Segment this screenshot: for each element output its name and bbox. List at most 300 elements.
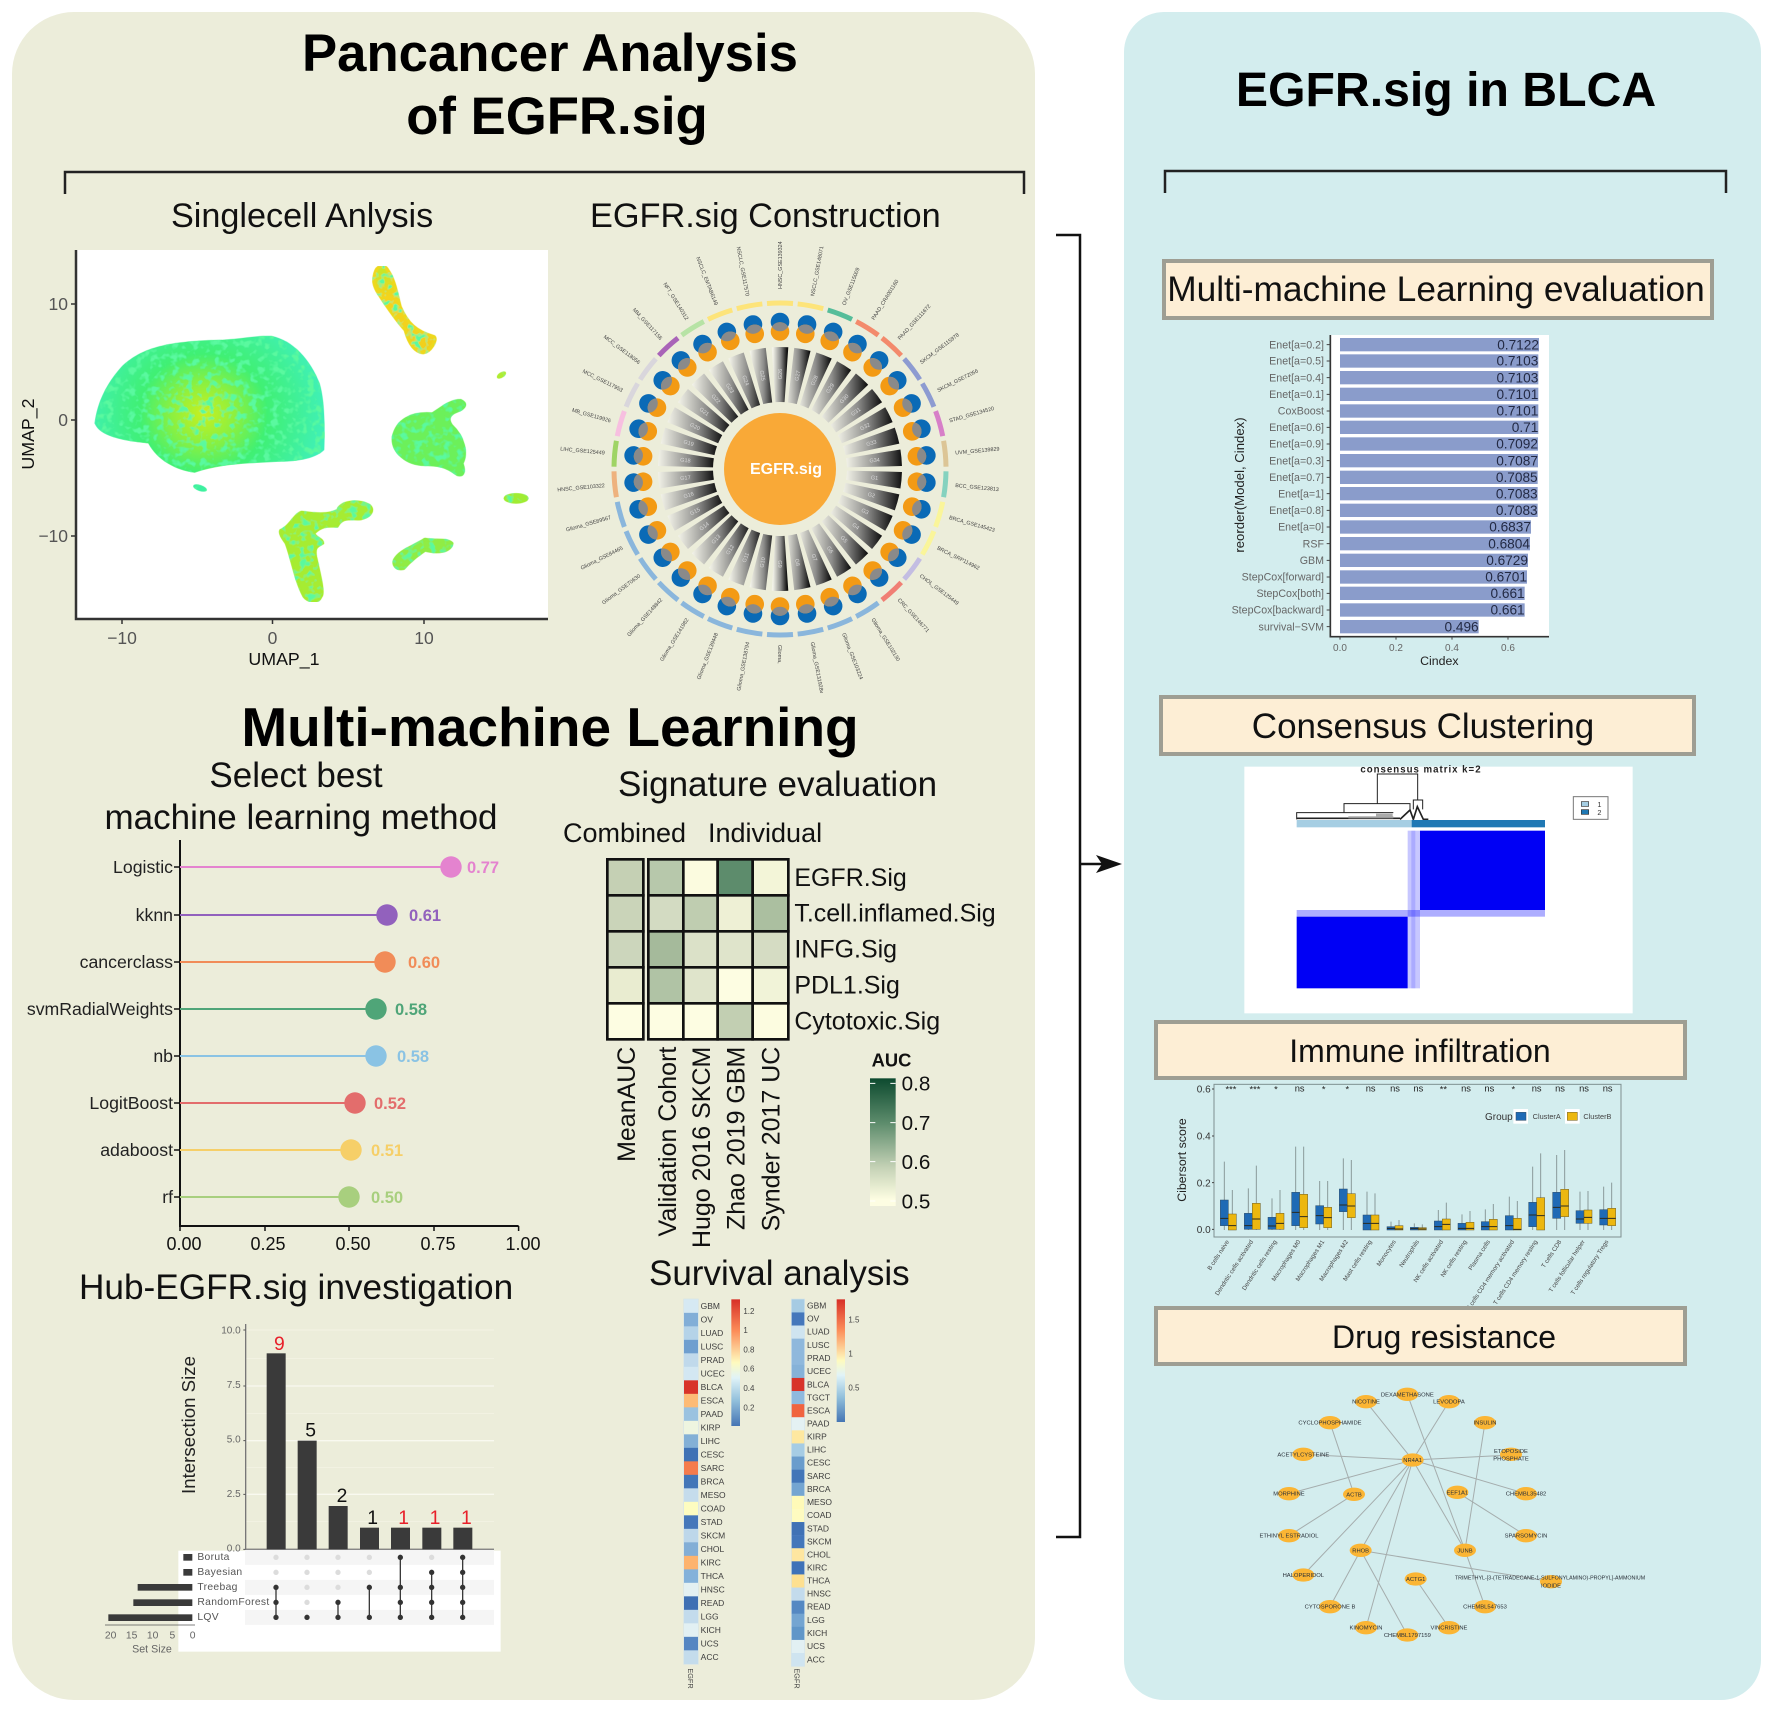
AUC colour legend: AUC: [872, 1050, 911, 1071]
y axis labels: 0.0: [1197, 1225, 1211, 1236]
cell type labels: T cells follicular helper: [1548, 1239, 1587, 1294]
heatmap: cancer types left: [683, 1299, 726, 1689]
centre: EGFR.sig circle: [724, 413, 836, 525]
ring: dataset labels: MCC_GSE118056: [602, 334, 641, 366]
upset y axis labels: 5.0: [227, 1435, 241, 1446]
ring: dataset labels: NSCLC_GSE117570: [735, 246, 750, 297]
model names: StepCox[forward]: [1242, 572, 1324, 584]
heading: Select best machine learning method: Select best: [209, 756, 383, 795]
heatmap row labels: T.cell.inflamed.Sig: [794, 899, 996, 927]
heatmap: cancer types right: KIRC: [807, 1563, 827, 1573]
chart: survival heatmaps: [683, 1299, 860, 1689]
network node labels: KINOMYCIN: [1349, 1626, 1383, 1632]
network nodes: [1278, 1388, 1562, 1642]
network node labels: VINCRISTINE: [1431, 1626, 1468, 1632]
heatmap: cancer types left: UCEC: [701, 1369, 725, 1379]
header box: Immune infiltration: [1156, 1022, 1685, 1078]
lollipop: Logistic: Logistic: [113, 857, 173, 877]
heatmap: cancer types left: SARC: [701, 1463, 724, 1473]
significance markers: ns: [1366, 1084, 1376, 1094]
box plot legend: ClusterA: [1533, 1112, 1561, 1121]
heatmap: cancer types right: SARC: [807, 1471, 831, 1481]
upset set names: [197, 1552, 270, 1623]
heatmap: cancer types right: LGG: [807, 1615, 825, 1625]
heatmap: cancer types right: HNSC: [807, 1589, 831, 1599]
cluster legend: 2: [1597, 808, 1601, 817]
ring: dataset labels: Glioma_GSE103224: [840, 632, 864, 681]
model names: RSF: [1303, 538, 1324, 550]
network node labels: SPARSOMYCIN: [1505, 1534, 1547, 1540]
upset y axis labels: 10.0: [221, 1326, 241, 1337]
ring: bar labels: G26: [778, 369, 784, 379]
Cindex values: 0.496: [1444, 619, 1479, 634]
ring: bar labels: G13: [711, 534, 722, 546]
upset set size axis: Set Size: [132, 1643, 172, 1655]
heatmap row labels: INFG.Sig: [794, 935, 897, 963]
upset bar values: 5: [305, 1421, 316, 1442]
chart: Cindex bar chart: 0.6: [1501, 643, 1515, 654]
upset intersection bars: [267, 1353, 472, 1549]
heading: Multi-machine Learning: Multi-machine Learning: [241, 696, 859, 758]
heatmap: cancer types left: ESCA: [701, 1396, 724, 1406]
Cindex values: 0.7101: [1497, 404, 1538, 419]
heatmap: cancer types right: OV: [807, 1314, 820, 1324]
AUC colour legend: 0.7: [902, 1112, 930, 1135]
heatmap: cancer types right: ACC: [807, 1654, 825, 1664]
lollipop: adaboost: [100, 1139, 403, 1161]
heatmap: cancer types right: READ: [807, 1602, 831, 1612]
chart: Cindex bar chart: [1232, 335, 1549, 668]
cell type labels: NK cells activated: [1412, 1238, 1445, 1284]
lollipop: Logistic: [113, 856, 499, 878]
upset set size axis: 15: [126, 1630, 138, 1641]
heading: Signature evaluation: Signature evaluation: [618, 765, 937, 804]
chart: UMAP scatter plot: 0: [58, 410, 68, 430]
significance markers: ns: [1579, 1084, 1589, 1094]
Cindex values: 0.6701: [1485, 570, 1527, 585]
heatmap: cancer types left: HNSC: [701, 1585, 725, 1595]
heatmap: cancer types right: THCA: [807, 1576, 830, 1586]
Cindex values: [1444, 337, 1539, 634]
heatmap: cancer types right: STAD: [807, 1523, 829, 1533]
heatmap: cancer types left: GBM: [701, 1301, 720, 1311]
cluster B boxes: [1228, 1189, 1616, 1230]
network node labels: [1259, 1392, 1645, 1639]
significance markers: ns: [1461, 1084, 1471, 1094]
ring: bar labels: G10: [759, 557, 767, 568]
ring: bar labels: G6: [825, 545, 834, 555]
legend: right survival colour scale: [837, 1299, 860, 1422]
cell type labels: T cells CD4 memory activated: [1465, 1238, 1516, 1312]
ring: dataset labels: Glioma_GSE102130: [870, 617, 901, 663]
labels: Combined and Individual: [563, 818, 822, 848]
lollipop: adaboost: adaboost: [100, 1140, 173, 1160]
model names: StepCox[both]: [1256, 588, 1324, 600]
heatmap row labels: PDL1.Sig: [794, 971, 900, 999]
heatmap: cancer types left: CHOL: [701, 1544, 725, 1554]
model names: Enet[a=0.4]: [1269, 372, 1324, 384]
lollipop: rf: rf: [162, 1187, 173, 1207]
cluster legend: 1: [1597, 800, 1601, 809]
model names: Enet[a=0.8]: [1269, 505, 1324, 517]
Cindex bars: [1340, 338, 1539, 633]
chart: Cindex bar chart: 0.2: [1389, 643, 1403, 654]
network node labels: INSULIN: [1473, 1421, 1496, 1427]
chart: drug-gene interaction network: [1259, 1388, 1645, 1642]
ring: bar labels: G15: [689, 507, 701, 517]
heatmap column labels: Zhao 2019 GBM: [723, 1047, 751, 1230]
heading: Select best machine learning method: [104, 756, 498, 837]
ring: dataset labels: Glioma_GSE141982: [659, 617, 690, 663]
heatmap: cancer types right: COAD: [807, 1510, 832, 1520]
Cindex values: 0.661: [1490, 586, 1525, 601]
heatmap: cancer types left: LGG: [701, 1612, 719, 1622]
chart: UMAP scatter plot: −10: [107, 628, 137, 648]
chart: Cindex bar chart: Cindex: [1420, 654, 1459, 668]
header box: Consensus Clustering: [1161, 697, 1694, 754]
heatmap: cancer types right: [791, 1299, 832, 1689]
cell type labels: Macrophages M2: [1318, 1238, 1350, 1283]
ring: bar labels: G23: [724, 383, 735, 395]
heatmap: cancer types right: BRCA: [807, 1484, 831, 1494]
AUC colour legend: [870, 1050, 930, 1213]
ring: bar labels: G19: [683, 439, 694, 448]
significance markers: *: [1346, 1085, 1350, 1095]
lollipop: kknn: 0.61: [409, 907, 441, 925]
upset set size bars: [108, 1554, 192, 1621]
model names: GBM: [1300, 555, 1324, 567]
cell type labels: Macrophages M0: [1271, 1238, 1303, 1283]
header box: Multi-machine Learning evaluation: Multi-machine Learning evaluation: [1167, 270, 1705, 309]
ring: bar labels: G32: [859, 422, 871, 432]
ring: bar labels: G9: [776, 560, 782, 568]
heatmap: cancer types left: UCS: [701, 1639, 719, 1649]
ring: bar labels: G34: [869, 458, 880, 464]
heatmap: cancer types right: LIHC: [807, 1445, 826, 1455]
dendrogram: [1297, 774, 1428, 819]
title: Pancancer Analysis of EGFR.sig: Pancancer Analysis: [302, 24, 798, 83]
lollipop: svmRadialWeights: 0.58: [395, 1001, 427, 1019]
Cindex values: 0.7103: [1497, 354, 1538, 369]
upset set size axis: 0: [190, 1630, 196, 1641]
network node labels: PHOSPHATE: [1493, 1456, 1529, 1462]
cluster A boxes: [1220, 1189, 1608, 1230]
upset set names: LQV: [197, 1612, 219, 1623]
upset set size axis: 5: [169, 1630, 175, 1641]
upset set size axis: 20: [105, 1630, 117, 1641]
network node labels: NR4A1: [1403, 1458, 1422, 1464]
network node labels: EEF1A1: [1446, 1490, 1468, 1496]
ring: bar labels: G22: [710, 394, 721, 405]
upset set names: Treebag: [197, 1582, 238, 1593]
heatmap: cancer types left: ACC: [701, 1652, 719, 1662]
panel: pancancer analysis background: [12, 12, 1035, 1700]
chart: Cindex bar chart: 0.4: [1445, 643, 1459, 654]
legend: left survival colour scale: 1.2: [743, 1307, 755, 1316]
network node labels: JUNB: [1457, 1548, 1473, 1554]
model names: Enet[a=0.5]: [1269, 356, 1324, 368]
heatmap: cancer types left: OV: [701, 1315, 713, 1325]
cluster legend: [1573, 797, 1608, 819]
median lines: [1220, 1205, 1616, 1229]
upset bar values: 9: [274, 1334, 285, 1355]
lollipop: nb: nb: [153, 1046, 173, 1066]
model names: [1232, 339, 1324, 633]
upset bar values: 1: [398, 1508, 409, 1529]
title: Pancancer Analysis of EGFR.sig: [302, 24, 798, 146]
heatmap: cancer types right: KIRP: [807, 1432, 827, 1442]
heatmap: cancer types left: LUSC: [701, 1342, 723, 1352]
significance markers: ***: [1226, 1085, 1237, 1095]
network node labels: RHOB: [1352, 1548, 1369, 1554]
chart: UMAP scatter plot: 10: [49, 294, 68, 314]
upset bar values: 2: [337, 1486, 347, 1507]
model names: Enet[a=0.7]: [1269, 472, 1324, 484]
lollipop: Logistic: 0.77: [467, 859, 499, 877]
upset y axis labels: 7.5: [227, 1380, 241, 1391]
heatmap: cancer types left: KICH: [701, 1625, 721, 1635]
ring: dataset labels: OV_GSE115009: [842, 267, 862, 306]
heatmap: cancer types right: MESO: [807, 1497, 832, 1507]
ring: dataset labels: PAAD_GSE111672: [897, 304, 932, 342]
network node labels: CHEMBL35482: [1506, 1492, 1546, 1498]
heatmap: cancer types left: LUAD: [701, 1328, 723, 1338]
lollipop: LogitBoost: 0.52: [374, 1095, 406, 1113]
ring: bar labels: G24: [740, 375, 750, 387]
chart: consensus matrix heatmap: [1244, 765, 1633, 1013]
cell type labels: B cells naive: [1206, 1238, 1231, 1272]
heatmap: cancer types right: TGCT: [807, 1392, 830, 1402]
AUC colour legend: 0.6: [902, 1151, 930, 1174]
heatmap: cancer types left: KIRP: [701, 1423, 721, 1433]
bracket: right panel: [1165, 171, 1726, 193]
heatmap: cancer types right: UCS: [807, 1641, 825, 1651]
title: Pancancer Analysis of EGFR.sig: of EGFR.sig: [406, 87, 708, 146]
heatmap: cancer types right: GBM: [807, 1301, 826, 1311]
heatmap: cancer types right: PAAD: [807, 1418, 829, 1428]
y axis title: Cibersort score: [1175, 1118, 1189, 1202]
header box: Consensus Clustering: Consensus Clustering: [1252, 707, 1594, 746]
lollipop: nb: [153, 1045, 429, 1067]
model names: survival−SVM: [1259, 621, 1324, 633]
heatmap: cancer types right: PRAD: [807, 1353, 831, 1363]
Cindex values: 0.71: [1512, 420, 1538, 435]
heatmap: cancer types right: EGFR: [793, 1668, 802, 1689]
arrow: bracket connecting pancancer panel to BLCA panel: [1056, 235, 1122, 1537]
heatmap: cancer types right: SKCM: [807, 1536, 832, 1546]
upset y axis labels: [221, 1326, 241, 1554]
ring: dataset labels: NFT_GSE140312: [661, 282, 689, 321]
lollipop: kknn: kknn: [136, 905, 173, 925]
header box: Multi-machine Learning evaluation: [1164, 261, 1712, 318]
significance markers: ns: [1295, 1084, 1305, 1094]
upset bar values: 1: [430, 1508, 440, 1529]
ring: bar labels: G31: [850, 407, 862, 418]
ring: bar labels: G30: [839, 394, 850, 405]
network node labels: ACTB: [1346, 1492, 1362, 1498]
lollipop: adaboost: 0.51: [371, 1142, 403, 1160]
network node labels: CHEMBL547653: [1463, 1605, 1507, 1611]
ring: bar labels: G12: [725, 544, 736, 556]
ring: dataset labels: NSCLC_EMTAB6149: [694, 256, 718, 306]
cell type labels: Monocytes: [1376, 1239, 1398, 1268]
chart: lollipop chart of machine learning methods: 1.00: [505, 1234, 541, 1254]
Cindex values: 0.7101: [1497, 387, 1538, 402]
model names: CoxBoost: [1278, 406, 1324, 418]
ring: dataset labels: MM_GSE117156: [631, 307, 663, 342]
ring: dataset labels: NSCLC_GSE148071: [810, 246, 825, 297]
chart: lollipop chart of machine learning methods: [27, 840, 541, 1254]
ring: dataset labels: UVM_GSE139829: [955, 446, 1000, 457]
ring: dataset labels: Glioma_GSE148842: [626, 597, 664, 638]
model names: StepCox[backward]: [1232, 605, 1324, 617]
cell type labels: T cells CD8: [1540, 1238, 1564, 1269]
ring: bar labels: G7: [809, 553, 818, 562]
lollipop: rf: 0.50: [371, 1189, 403, 1207]
lollipop: kknn: [136, 904, 441, 926]
upset bar values: 1: [461, 1508, 472, 1529]
model names: Enet[a=0.1]: [1269, 389, 1324, 401]
y axis labels: 0.4: [1197, 1132, 1211, 1143]
ring: dataset labels: Glioma_GSE84465: [580, 546, 624, 572]
ring: dataset labels: MCC_GSE117953: [581, 369, 623, 394]
heading: Singlecell Anlysis: Singlecell Anlysis: [171, 197, 433, 235]
ring: dataset labels: SKCM_GSE72056: [937, 368, 979, 394]
model names: Enet[a=0.6]: [1269, 422, 1324, 434]
lollipop: LogitBoost: LogitBoost: [89, 1093, 173, 1113]
chart: lollipop chart of machine learning methods: 0.25: [250, 1234, 286, 1254]
ring: bar labels: G25: [758, 370, 766, 381]
Cindex values: 0.7083: [1496, 503, 1538, 518]
network node labels: ACTG1: [1406, 1577, 1425, 1583]
header box: Drug resistance: [1156, 1308, 1685, 1364]
heatmap: cancer types left: CESC: [701, 1450, 724, 1460]
network node labels: IODIDE: [1541, 1583, 1561, 1589]
panel: EGFR.sig in BLCA background: [1124, 12, 1761, 1700]
ring: dataset labels: CHOL_GSE125449: [918, 573, 959, 607]
upset y axis labels: 0.0: [227, 1543, 241, 1554]
significance markers: **: [1440, 1085, 1447, 1095]
heatmap: cancer types right: UCEC: [807, 1366, 831, 1376]
heading: EGFR.sig Construction: EGFR.sig Construction: [590, 197, 941, 235]
legend: right survival colour scale: 0.5: [848, 1384, 860, 1393]
Cindex values: 0.6729: [1486, 553, 1528, 568]
upset matrix: [245, 1555, 494, 1620]
network node labels: HALOPERIDOL: [1283, 1573, 1325, 1579]
ring: dataset labels: Glioma_GSE89567: [565, 515, 612, 534]
ring: dataset labels: [557, 241, 1000, 694]
heatmap: cancer types left: KIRC: [701, 1558, 721, 1568]
chart: Cindex bar chart: reorder(Model, Cindex): [1232, 417, 1247, 553]
header box: Drug resistance: Drug resistance: [1332, 1319, 1556, 1355]
lollipop: cancerclass: cancerclass: [80, 952, 173, 972]
ring: dataset labels: MB_GSE119926: [571, 408, 611, 424]
ring: dataset labels: BRCA_SRP114962: [936, 546, 980, 572]
model names: Enet[a=0.2]: [1269, 339, 1324, 351]
ring: bar labels: G5: [839, 535, 848, 544]
ring: gradient bars G1 to G34: [658, 347, 902, 591]
network node labels: TRIMETHYL-[3-(TETRADECANE-1-SULFONYLAMINO)-PROPYL]-AMMONIUM: [1455, 1575, 1645, 1581]
network node labels: CHEMBL1797159: [1384, 1633, 1431, 1639]
ring: dataset colour segments: [613, 303, 947, 635]
Cindex values: 0.7085: [1496, 470, 1538, 485]
ring: bar labels: G20: [689, 422, 701, 432]
heatmap: cancer types left: MESO: [701, 1490, 726, 1500]
significance markers: ns: [1532, 1084, 1542, 1094]
heatmap: cancer types left: STAD: [701, 1517, 723, 1527]
blue consensus blocks: [1297, 831, 1545, 988]
chart: lollipop chart of machine learning methods: 0.75: [420, 1234, 456, 1254]
ring: dataset labels: CRC_GSE146771: [896, 597, 930, 634]
model names: Enet[a=0]: [1278, 522, 1324, 534]
box plot legend: Group: [1485, 1112, 1513, 1123]
network node labels: CYCLOPHOSPHAMIDE: [1298, 1421, 1362, 1427]
cell type labels: Mast cells resting: [1342, 1238, 1374, 1283]
Cindex values: 0.7103: [1497, 370, 1538, 385]
heatmap: cancer types left: LIHC: [701, 1436, 720, 1446]
cell type labels: NK cells resting: [1440, 1238, 1469, 1279]
title: EGFR.sig in BLCA: EGFR.sig in BLCA: [1236, 63, 1656, 117]
model names: Enet[a=1]: [1278, 488, 1324, 500]
upset bar values: 1: [367, 1508, 378, 1529]
heatmap: cancer types left: SKCM: [701, 1531, 725, 1541]
heading: Hub-EGFR.sig investigation: Hub-EGFR.sig investigation: [79, 1268, 513, 1307]
ring: dataset labels: Glioma_GSE139448: [696, 632, 720, 681]
heatmap: cancer types right: KICH: [807, 1628, 827, 1638]
heatmap: cancer types right: LUAD: [807, 1327, 830, 1337]
lollipop: cancerclass: [80, 951, 440, 973]
AUC colour legend: 0.5: [902, 1190, 930, 1213]
Cindex values: 0.661: [1490, 603, 1525, 618]
cell type labels: Macrophages M1: [1295, 1238, 1327, 1283]
heatmap: cancer types left: PAAD: [701, 1409, 723, 1419]
ring: bar labels: [680, 369, 880, 568]
chart: UMAP scatter plot: UMAP_2: [18, 398, 39, 470]
bracket: left panel: [65, 172, 1024, 194]
cell type labels: Neutrophils: [1398, 1239, 1421, 1269]
ring: dataset labels: Glioma_GSE138794: [736, 642, 751, 691]
ring: bar labels: G33: [866, 439, 877, 448]
ring: bar labels: G29: [825, 383, 836, 395]
significance markers: ***: [1250, 1085, 1261, 1095]
network node labels: MORPHINE: [1273, 1492, 1305, 1498]
lollipop: svmRadialWeights: svmRadialWeights: [27, 999, 173, 1019]
significance markers: ns: [1555, 1084, 1565, 1094]
header box: Immune infiltration: Immune infiltration: [1289, 1033, 1551, 1069]
legend: left survival colour scale: 1: [743, 1326, 748, 1335]
ring: dataset labels: BCC_GSE123813: [955, 483, 999, 493]
heatmap column labels: Validation Cohort: [654, 1047, 682, 1236]
ring: dataset labels: PAAD_CRA001160: [871, 279, 900, 321]
upset y axis title: Intersection Size: [178, 1356, 199, 1494]
cell type labels: Dendritic cells activated: [1214, 1238, 1255, 1297]
upset y axis labels: 2.5: [227, 1489, 241, 1500]
heatmap: cancer types left: BRCA: [701, 1477, 725, 1487]
cell type labels: [1206, 1238, 1610, 1312]
y axis labels: 0.2: [1197, 1178, 1211, 1189]
significance markers: ns: [1390, 1084, 1400, 1094]
cell type labels: Plasma cells: [1467, 1239, 1492, 1272]
ring: bar labels: G3: [860, 508, 869, 516]
ring: dataset labels: LIHC_GSE125449: [560, 446, 605, 457]
lollipop: LogitBoost: [89, 1092, 406, 1114]
chart: UpSet plot: [105, 1324, 501, 1655]
Cindex values: 0.7083: [1496, 486, 1538, 501]
heatmap: cancer types right: CESC: [807, 1458, 831, 1468]
heatmap: cancer types left: EGFR: [686, 1668, 695, 1689]
significance markers: ns: [1413, 1084, 1424, 1094]
cell type labels: Dendritic cells resting: [1241, 1238, 1279, 1292]
